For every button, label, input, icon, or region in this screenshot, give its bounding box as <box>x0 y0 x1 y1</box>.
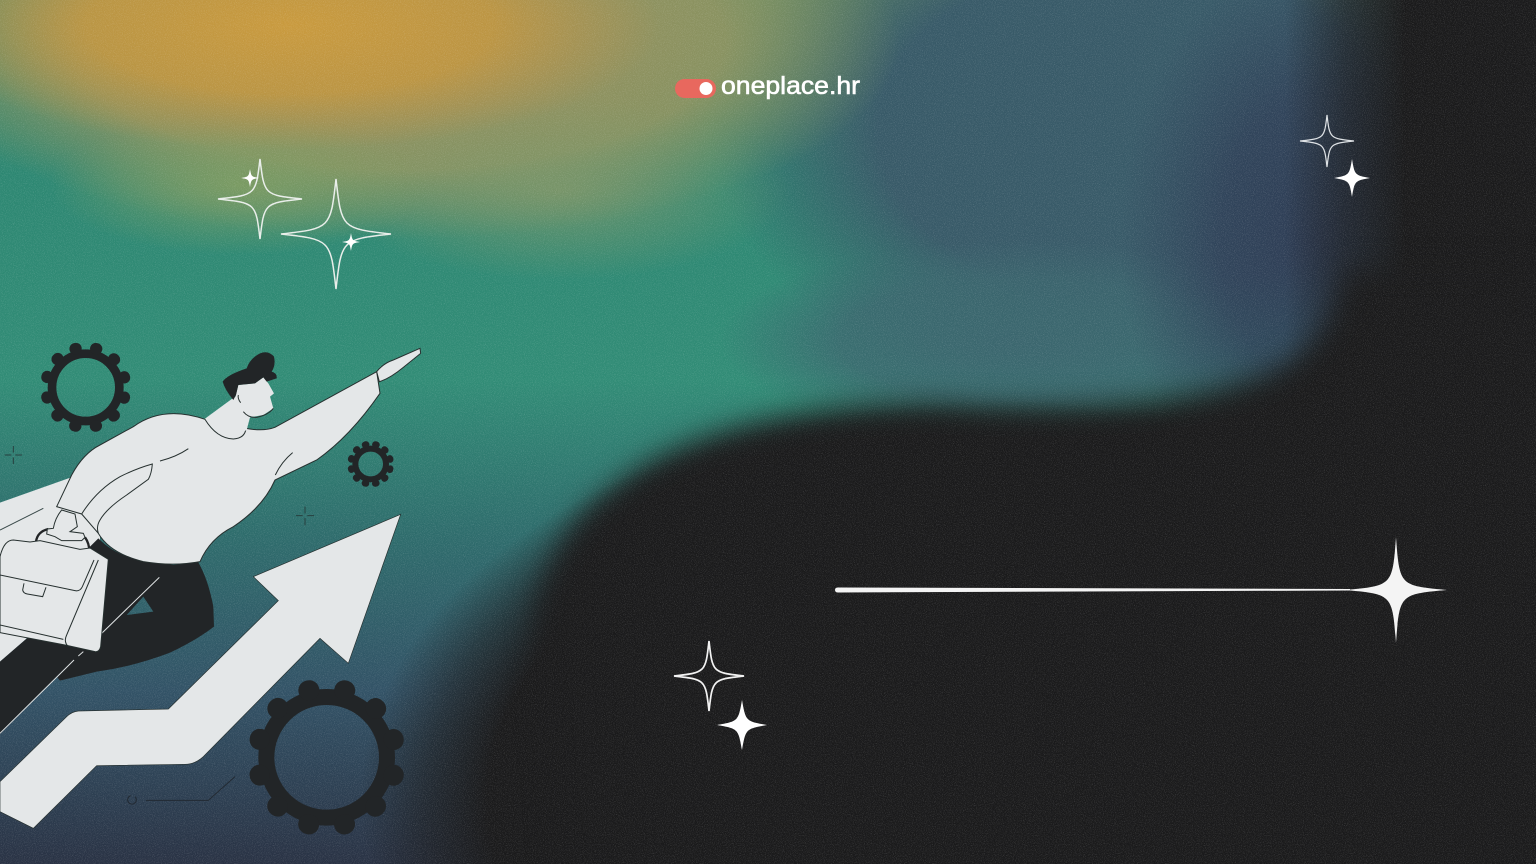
sweater <box>57 372 380 564</box>
sparkles: bottom centre cluster <box>674 641 767 750</box>
logo wordmark: oneplace.hr <box>721 72 860 100</box>
gear medium <box>46 347 126 427</box>
cape wedge behind figure <box>0 476 100 662</box>
neck fill <box>204 397 248 440</box>
sparkles: top left cluster <box>218 159 391 289</box>
logo: oneplace.hr <box>675 72 860 100</box>
growth arrow <box>0 514 401 828</box>
face lines <box>238 395 273 417</box>
raised hand <box>377 348 421 382</box>
face <box>227 377 274 437</box>
trouser crease <box>0 577 159 733</box>
trousers <box>0 538 214 734</box>
gear large <box>257 688 396 827</box>
long divider with sparkle <box>835 537 1447 643</box>
circuit line decoration <box>128 777 235 804</box>
small crosshair marks <box>5 446 314 525</box>
briefcase <box>0 540 108 652</box>
gear small <box>351 444 391 484</box>
logo toggle icon <box>675 79 716 98</box>
briefcase handle <box>36 529 89 552</box>
hair <box>223 352 277 400</box>
sparkles: top right cluster <box>1300 115 1370 197</box>
hand on handle <box>47 510 85 541</box>
illustration: businessman flying on growth arrow <box>0 347 421 828</box>
sweater fold lines and sleeve <box>82 449 293 533</box>
